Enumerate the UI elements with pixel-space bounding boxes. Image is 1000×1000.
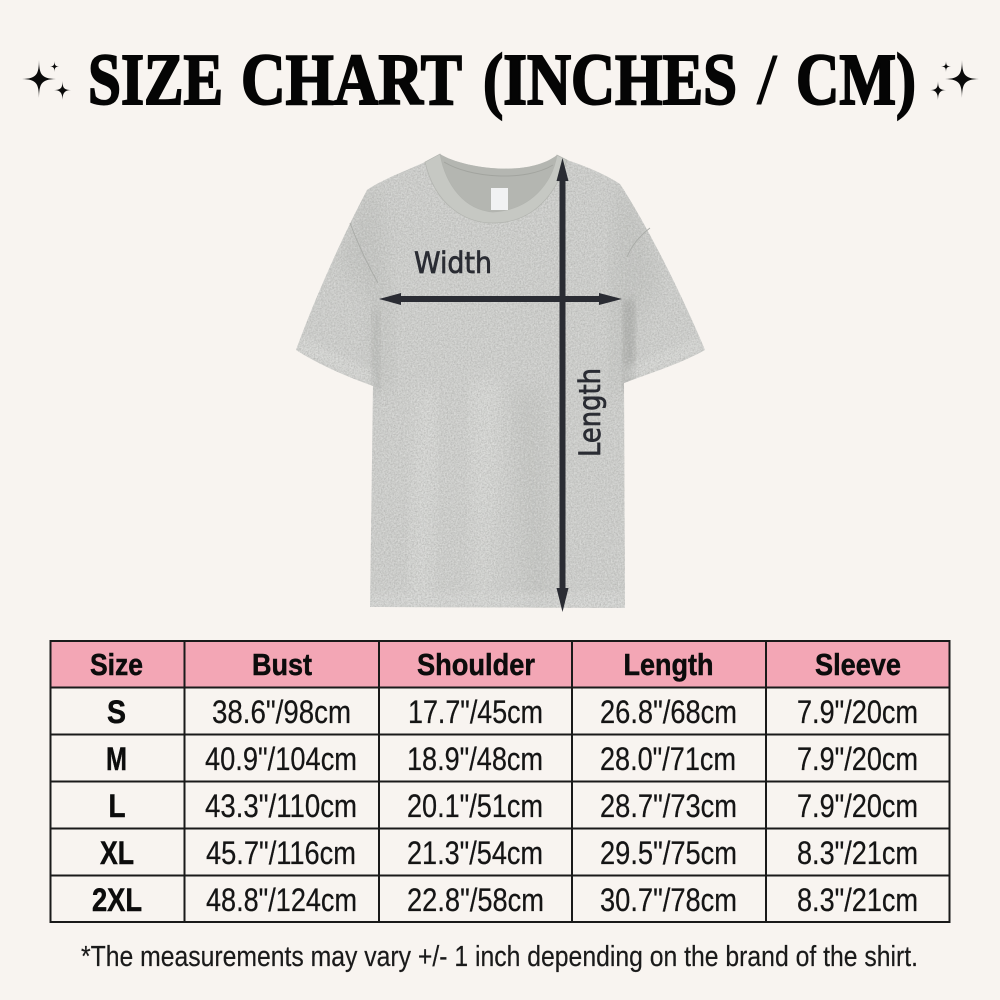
row L	[108, 788, 918, 824]
row 2XL: 48.8"/124cm	[206, 882, 357, 918]
neck label	[491, 188, 508, 210]
table header labels: Bust	[252, 647, 312, 682]
table header labels: Shoulder	[417, 647, 535, 682]
row M: M	[106, 741, 127, 777]
title	[88, 39, 916, 120]
row XL: 29.5"/75cm	[600, 835, 737, 871]
row XL: 21.3"/54cm	[407, 835, 543, 871]
title: /	[756, 39, 779, 120]
title: SIZE	[88, 39, 223, 120]
row 2XL: 30.7"/78cm	[600, 882, 737, 918]
title: CHART	[241, 39, 462, 120]
table header labels	[90, 647, 901, 682]
table grid	[50, 641, 950, 922]
row 2XL: 8.3"/21cm	[797, 882, 918, 918]
width arrow	[379, 293, 622, 305]
table header band	[50, 641, 950, 687]
row S: 38.6"/98cm	[212, 694, 351, 730]
row L: 43.3"/110cm	[205, 788, 357, 824]
row M	[106, 741, 918, 777]
row S	[107, 694, 918, 730]
row XL: 45.7"/116cm	[206, 835, 356, 871]
size table	[50, 641, 950, 922]
sleeve seams	[350, 223, 378, 283]
table header labels: Length	[624, 647, 714, 682]
table header labels: Sleeve	[815, 647, 901, 682]
row S: 26.8"/68cm	[600, 694, 737, 730]
row L: L	[108, 788, 126, 824]
row S: 7.9"/20cm	[797, 694, 918, 730]
t-shirt illustration	[290, 150, 710, 610]
width label: Width	[414, 246, 492, 280]
row S: 17.7"/45cm	[408, 694, 543, 730]
row XL: XL	[100, 835, 134, 871]
row M: 28.0"/71cm	[600, 741, 736, 777]
row 2XL	[92, 882, 918, 918]
title: CM)	[796, 39, 916, 120]
row M: 7.9"/20cm	[797, 741, 918, 777]
title: (INCHES	[483, 39, 737, 120]
table body	[50, 687, 950, 922]
icon: sparkles left	[22, 60, 71, 100]
row 2XL: 2XL	[92, 882, 142, 918]
icon: sparkles right	[930, 60, 979, 100]
row L: 28.7"/73cm	[600, 788, 737, 824]
collar	[440, 154, 557, 212]
length arrow	[556, 158, 568, 612]
shirt body	[296, 154, 705, 608]
row L: 7.9"/20cm	[797, 788, 918, 824]
row M: 40.9"/104cm	[205, 741, 357, 777]
row M: 18.9"/48cm	[407, 741, 543, 777]
row XL	[100, 835, 918, 871]
row S: S	[107, 694, 126, 730]
length label: Length	[573, 368, 607, 457]
table header labels: Size	[90, 647, 143, 682]
row L: 20.1"/51cm	[407, 788, 543, 824]
row 2XL: 22.8"/58cm	[407, 882, 544, 918]
row XL: 8.3"/21cm	[797, 835, 918, 871]
